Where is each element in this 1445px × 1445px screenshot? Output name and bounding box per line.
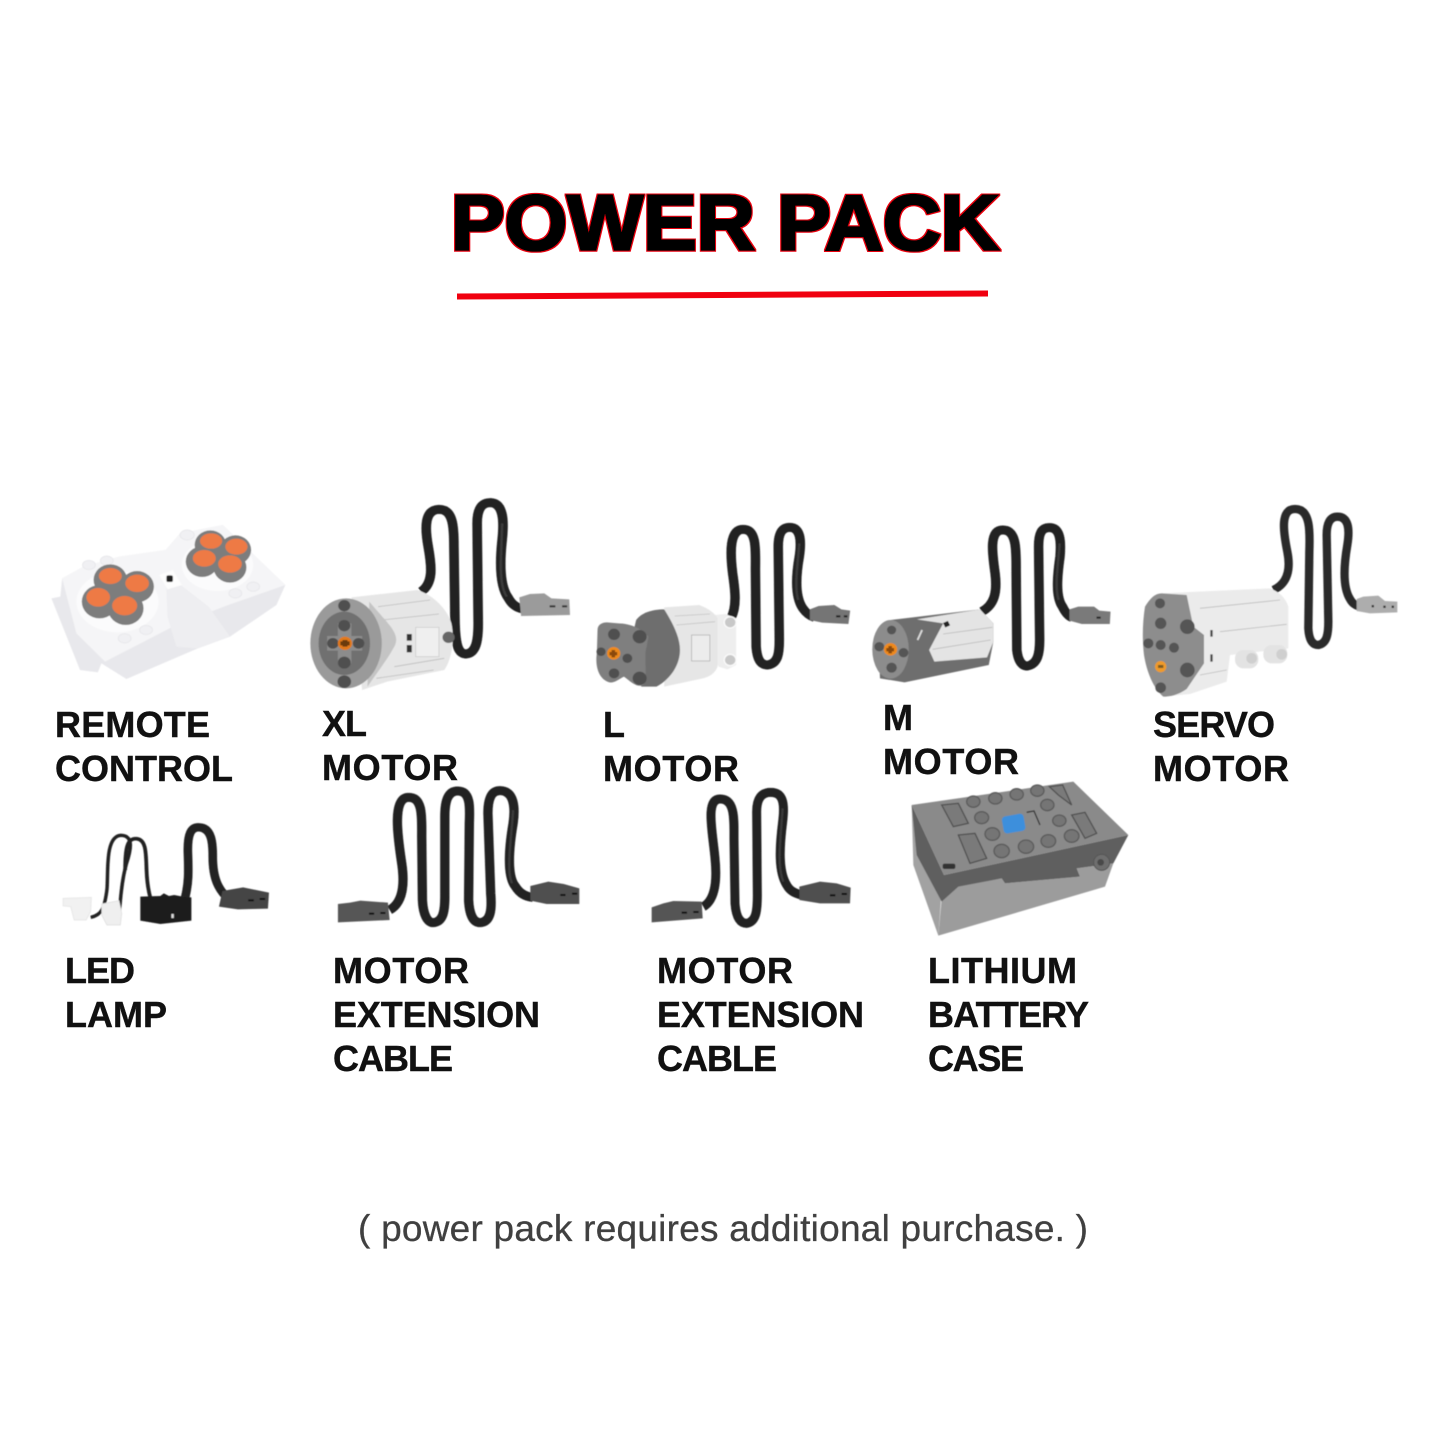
item: lithium battery case <box>912 782 1128 1079</box>
right control pad <box>186 530 251 583</box>
title: POWER PACK <box>451 179 999 267</box>
item: servo motor <box>1143 509 1397 789</box>
icon: long extension cable <box>338 791 579 923</box>
label: lithium battery case: BATTERY <box>928 994 1089 1035</box>
footnote: ( power pack requires additional purchase. ) <box>358 1208 1088 1249</box>
label: remote control: CONTROL <box>55 748 233 789</box>
label: servo motor: MOTOR <box>1153 748 1289 789</box>
label: motor extension cable: CABLE <box>657 1038 777 1079</box>
icon: XL motor with cable <box>310 503 570 690</box>
title underline <box>457 290 988 300</box>
item: M motor <box>872 528 1111 782</box>
label: motor extension cable: MOTOR <box>657 950 793 991</box>
label: L motor: MOTOR <box>603 748 739 789</box>
icon: remote control <box>51 525 285 679</box>
item: L motor <box>596 527 850 789</box>
label: M motor: MOTOR <box>883 741 1019 782</box>
icon: short extension cable <box>652 792 851 923</box>
label: M motor: M <box>883 697 913 738</box>
icon: L motor with cable <box>596 527 850 687</box>
label: servo motor: SERVO <box>1153 704 1275 745</box>
label: motor extension cable: EXTENSION <box>333 994 540 1035</box>
label: XL motor: XL <box>322 703 367 744</box>
label: motor extension cable: CABLE <box>333 1038 453 1079</box>
label: XL motor: MOTOR <box>322 747 458 788</box>
label: remote control: REMOTE <box>55 704 210 745</box>
label: lithium battery case: LITHIUM <box>928 950 1077 991</box>
label: lithium battery case: CASE <box>928 1038 1024 1079</box>
label: motor extension cable: EXTENSION <box>657 994 864 1035</box>
icon: battery case <box>912 782 1128 936</box>
label: LED lamp: LAMP <box>65 994 167 1035</box>
item: LED lamp <box>63 827 269 1035</box>
item: motor extension cable (long) <box>333 791 579 1079</box>
item: remote control <box>51 525 285 789</box>
left control pad <box>82 564 154 625</box>
item: XL motor <box>310 503 570 788</box>
icon: M motor with cable <box>872 528 1111 682</box>
label: motor extension cable: MOTOR <box>333 950 469 991</box>
item: motor extension cable (short) <box>652 792 864 1079</box>
label: L motor: L <box>603 704 625 745</box>
icon: LED lamp with cables <box>63 827 269 925</box>
label: LED lamp: LED <box>65 950 135 991</box>
icon: servo motor with cable <box>1143 509 1397 697</box>
